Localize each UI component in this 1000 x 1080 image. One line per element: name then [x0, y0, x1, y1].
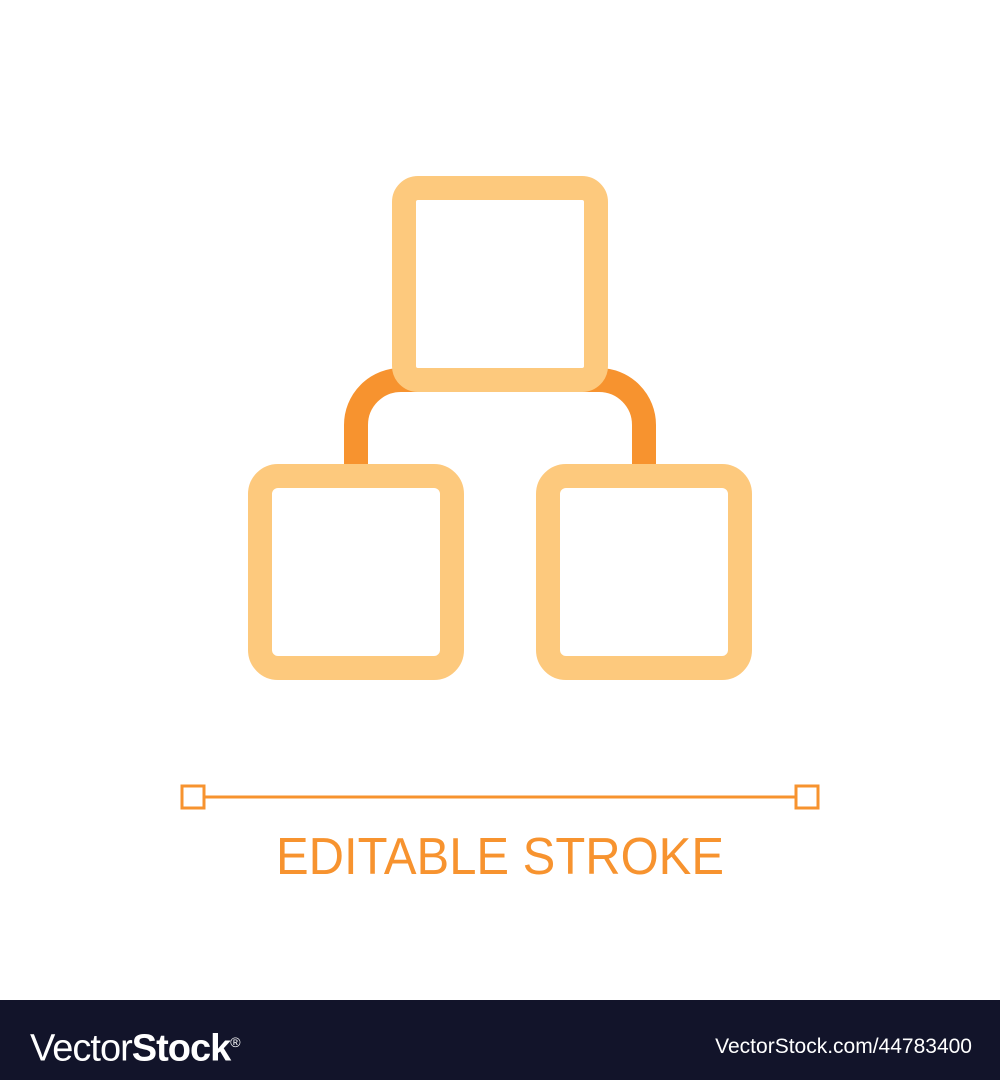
connector lines: [356, 380, 644, 470]
caption: EDITABLE STROKE: EDITABLE STROKE: [276, 828, 724, 886]
footer logo: VectorStock®: [30, 1028, 240, 1070]
bottom left box: [260, 476, 452, 668]
editable stroke line with handles: [182, 786, 818, 808]
bottom right box: [548, 476, 740, 668]
footer bar: [0, 1000, 1000, 1080]
footer url: VectorStock.com/44783400: [715, 1035, 972, 1058]
top box: [404, 188, 596, 380]
